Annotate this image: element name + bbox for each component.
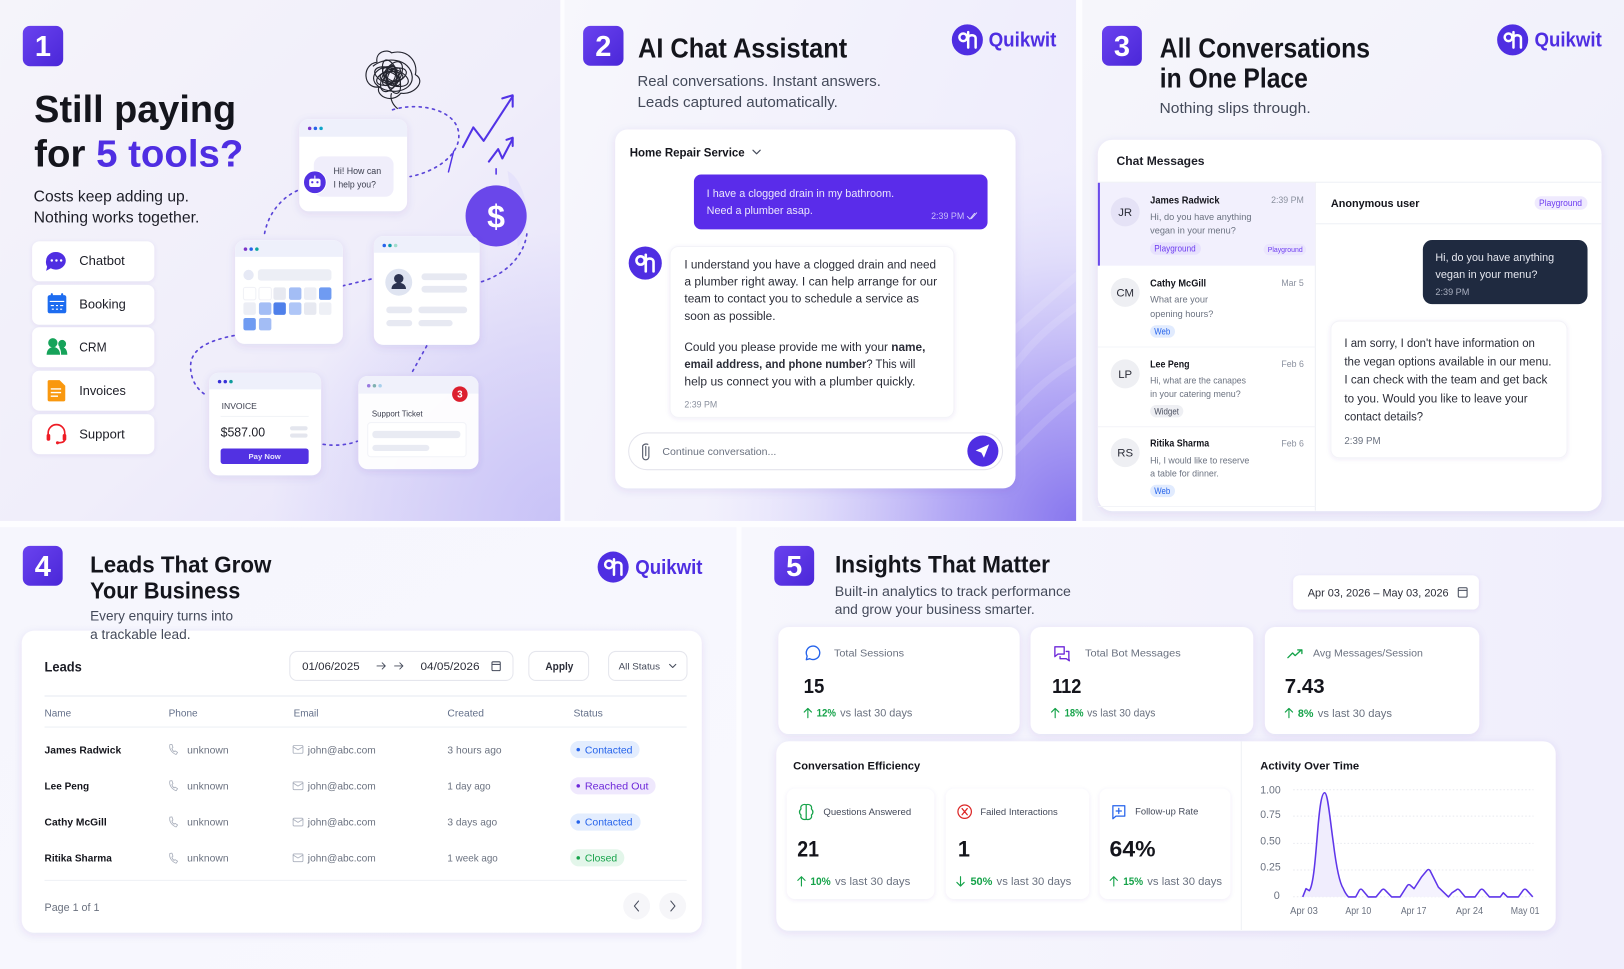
table header: Name (45, 709, 72, 720)
conversation: cathy mcgill: What are your (1150, 295, 1208, 305)
tool: invoices (32, 371, 154, 411)
button: pay now: Pay Now (248, 452, 282, 461)
message input (629, 433, 1003, 470)
conversation: cathy mcgill: Web (1154, 327, 1170, 337)
thread header: Anonymous user (1331, 198, 1420, 210)
conversation: ritika sharma: Hi, I would like to reserve (1150, 455, 1249, 465)
icon: growth arrows (448, 95, 513, 174)
tool: chatbot (32, 241, 154, 281)
tool: invoices: Invoices (79, 383, 126, 398)
row: ritika sharma: unknown (187, 854, 229, 865)
tool: chatbot: Chatbot (79, 253, 125, 268)
heading (1160, 32, 1370, 94)
conversation: cathy mcgill: CM (1116, 288, 1134, 300)
row: james radwick: James Radwick (45, 745, 121, 756)
table header: Email (294, 709, 318, 720)
stat: follow-up rate: 15% (1123, 876, 1143, 888)
row: lee peng: john@abc.com (307, 782, 376, 793)
badge 3: 3 (1114, 31, 1130, 63)
logo: quikwit (952, 24, 1057, 55)
tool: crm: CRM (79, 340, 107, 355)
stat: failed interactions: 1 (958, 837, 970, 862)
line chart: activity over time: Apr 03 (1290, 906, 1318, 917)
icon: paperclip (643, 444, 649, 460)
title: for 5 tools? (34, 134, 243, 176)
leads table card (22, 631, 702, 933)
bot reply bubble: I can check with the team and get back (1344, 373, 1547, 387)
icon: dollar coin: $ (487, 198, 505, 234)
heading: Insights That Matter (835, 552, 1050, 579)
line chart: activity over time: 1.00 (1260, 784, 1281, 796)
status filter (609, 651, 687, 680)
bot avatar (629, 246, 662, 280)
chat window card (615, 129, 1016, 488)
stat: questions answered: Questions Answered (823, 807, 911, 817)
conversation selector: Home Repair Service (630, 145, 745, 159)
user message bubble: 2:39 PM (931, 211, 964, 221)
line chart: activity over time: Apr 10 (1345, 906, 1372, 917)
analytics card (776, 741, 1556, 931)
subheading: and grow your business smarter. (835, 602, 1035, 617)
dotted connectors (191, 107, 527, 445)
badge 3 (1102, 26, 1142, 66)
subheading: Nothing slips through. (1159, 101, 1311, 117)
icon: two bubbles (1055, 647, 1069, 661)
metric: avg messages per session: 8% (1298, 708, 1314, 720)
title (34, 89, 243, 176)
stat: questions answered: 21 (797, 837, 819, 862)
row: lee peng (45, 777, 656, 794)
subtitle (34, 188, 199, 227)
subtitle: Nothing works together. (34, 210, 199, 227)
conversation: james radwick: vegan in your menu? (1150, 225, 1236, 235)
metric: total sessions: vs last 30 days (840, 708, 913, 720)
badge 2: 2 (595, 31, 611, 63)
conversation: ritika sharma: Feb 6 (1281, 438, 1304, 448)
date range filter (290, 651, 513, 680)
row: ritika sharma (45, 849, 624, 866)
badge 1: 1 (35, 31, 51, 63)
status filter: All Status (619, 662, 660, 672)
message input: Continue conversation... (662, 447, 776, 458)
bot reply bubble: I am sorry, I don't have information on (1344, 336, 1535, 350)
apply button (529, 651, 589, 680)
row: cathy mcgill (45, 814, 641, 831)
subheading: Leads captured automatically. (637, 95, 838, 111)
subheading (637, 74, 881, 111)
stat: failed interactions (946, 789, 1089, 899)
stat: follow-up rate: Follow-up Rate (1135, 807, 1198, 817)
row: lee peng: 1 day ago (447, 782, 491, 793)
metric: total sessions: 12% (817, 708, 836, 720)
subheading: a trackable lead. (90, 627, 191, 642)
line chart: activity over time (1260, 784, 1540, 917)
tool: booking (32, 285, 154, 325)
conversation: cathy mcgill: opening hours? (1150, 309, 1213, 319)
metric: total sessions (778, 627, 1020, 734)
icon: message plus (1113, 806, 1125, 819)
table header: Created (447, 709, 484, 720)
section heading: conversation efficiency: Conversation Efficiency (793, 761, 921, 773)
stat: failed interactions: 50% (970, 876, 993, 888)
line chart: activity over time: Apr 17 (1401, 906, 1426, 917)
bot message bubble: email address, and phone number? This will (684, 357, 915, 371)
heading (90, 551, 272, 604)
conversation: lee peng (1111, 359, 1304, 417)
user message bubble (694, 175, 988, 229)
conversation: ritika sharma: RS (1117, 448, 1134, 460)
chat messages card (1098, 140, 1602, 511)
stat: follow-up rate: vs last 30 days (1147, 876, 1223, 888)
conversation: ritika sharma (1111, 438, 1304, 497)
panel 4: leads (0, 527, 736, 969)
panel 1: still paying for 5 tools (0, 0, 560, 521)
heading: All Conversations (1160, 32, 1370, 63)
conversation: james radwick: 2:39 PM (1271, 195, 1304, 205)
user message bubble: Need a plumber asap. (707, 205, 813, 217)
metric: total bot messages: 18% (1065, 708, 1084, 720)
bot message bubble: team to contact you to schedule a service as (684, 292, 919, 306)
stat: questions answered: vs last 30 days (835, 876, 911, 888)
row: cathy mcgill: Cathy McGill (45, 818, 107, 829)
card: crm window (374, 236, 480, 345)
card: chatbot window: Hi! How can (334, 166, 381, 176)
date range filter: 04/05/2026 (421, 661, 480, 673)
metric: avg messages per session (1265, 627, 1479, 734)
icon: scribble (366, 51, 420, 109)
line chart: activity over time: 0.50 (1260, 835, 1281, 847)
row: james radwick: john@abc.com (307, 745, 376, 756)
tool: crm (32, 327, 154, 367)
icon: failure circle (958, 805, 971, 818)
section heading: activity over time: Activity Over Time (1260, 761, 1359, 773)
card: chatbot window (299, 119, 407, 211)
card: support ticket window: Support Ticket (372, 409, 423, 418)
metric: total bot messages (1031, 627, 1253, 734)
metric: avg messages per session: vs last 30 days (1318, 708, 1393, 720)
table header: Phone (169, 709, 198, 720)
logo: quikwit: Quikwit (1535, 29, 1602, 52)
leads table card: Leads (45, 660, 82, 675)
metric: avg messages per session: 7.43 (1285, 675, 1325, 698)
row: lee peng: Lee Peng (45, 782, 89, 793)
badge 2 (583, 26, 624, 66)
thread header: Playground (1539, 198, 1582, 208)
bot message bubble (670, 246, 954, 417)
bot message bubble: 2:39 PM (684, 399, 717, 409)
pagination: Page 1 of 1 (45, 902, 99, 914)
conversation: ritika sharma: Ritika Sharma (1150, 439, 1210, 450)
bot message bubble: soon as possible. (684, 309, 776, 323)
apply button: Apply (545, 661, 573, 673)
conversation: lee peng: in your catering menu? (1150, 389, 1241, 399)
row: lee peng: Reached Out (585, 782, 649, 793)
dark user bubble: vegan in your menu? (1435, 269, 1537, 281)
conversation: lee peng: LP (1118, 369, 1132, 381)
row: james radwick (45, 741, 640, 758)
badge 4: 4 (35, 551, 51, 583)
user message bubble: I have a clogged drain in my bathroom. (707, 188, 894, 200)
conversation: james radwick: Hi, do you have anything (1150, 212, 1251, 222)
panel 5: insights (742, 527, 1624, 969)
dark user bubble (1423, 240, 1588, 304)
row: lee peng: unknown (187, 782, 229, 793)
date range: Apr 03, 2026 – May 03, 2026 (1308, 587, 1449, 599)
conversation: james radwick (1098, 183, 1315, 266)
bot message bubble: a plumber right away. I can help arrange for our (684, 275, 937, 289)
line chart: activity over time: 0.25 (1260, 862, 1281, 874)
tool: booking: Booking (79, 297, 126, 312)
stat: failed interactions: vs last 30 days (997, 876, 1072, 888)
table header (45, 709, 603, 720)
title: Still paying (34, 89, 236, 131)
metric: total bot messages: vs last 30 days (1087, 708, 1156, 720)
conversation: cathy mcgill (1111, 278, 1304, 338)
badge 1 (23, 26, 63, 66)
logo: quikwit: Quikwit (989, 29, 1057, 52)
panel 3: all conversations (1082, 0, 1624, 521)
logo: quikwit: Quikwit (635, 556, 703, 579)
bot reply bubble: 2:39 PM (1344, 436, 1381, 447)
stat: follow-up rate (1100, 789, 1230, 899)
conversation: ritika sharma: Web (1154, 486, 1170, 496)
bot message bubble: I understand you have a clogged drain and need (684, 257, 936, 271)
bot message bubble: help us connect you with a plumber quickly. (684, 374, 915, 388)
metric: total sessions: 15 (804, 675, 824, 698)
heading: AI Chat Assistant (638, 32, 847, 63)
icon: trend (1288, 650, 1302, 658)
thread header (1331, 196, 1587, 210)
card: invoice window (209, 373, 321, 475)
row: cathy mcgill: 3 days ago (447, 818, 497, 829)
row: james radwick: unknown (187, 745, 229, 756)
conversation: james radwick: JR (1118, 207, 1132, 219)
logo: quikwit (598, 552, 703, 583)
subheading: Real conversations. Instant answers. (637, 74, 881, 90)
metric: avg messages per session: Avg Messages/Session (1313, 649, 1423, 660)
line chart: activity over time: 0 (1274, 890, 1280, 902)
line chart: activity over time: May 01 (1511, 906, 1540, 917)
card: calendar window (235, 240, 343, 344)
card: chatbot window: I help you? (334, 179, 376, 189)
subheading: Every enquiry turns into (90, 608, 233, 623)
subheading: Built-in analytics to track performance (835, 584, 1071, 599)
badge 5: 5 (786, 551, 802, 583)
bot reply bubble: contact details? (1344, 409, 1423, 423)
card: invoice window: $587.00 (221, 425, 265, 440)
icon: chat bubble (806, 646, 820, 660)
bot reply bubble (1331, 321, 1567, 458)
subheading (90, 608, 233, 642)
row: cathy mcgill: john@abc.com (307, 818, 376, 829)
subtitle: Costs keep adding up. (34, 188, 189, 205)
heading: Your Business (90, 578, 240, 604)
row: ritika sharma: john@abc.com (307, 854, 376, 865)
stat: failed interactions: Failed Interactions (980, 807, 1058, 817)
date range (1293, 575, 1479, 610)
pagination (45, 893, 686, 919)
conversation: lee peng: Widget (1154, 406, 1179, 416)
conversation: ritika sharma: a table for dinner. (1150, 469, 1219, 479)
metric: total bot messages: 112 (1052, 675, 1081, 698)
icon: robot (303, 171, 326, 194)
conversation: james radwick: James Radwick (1150, 196, 1220, 207)
badge 5 (774, 546, 814, 586)
conversation: cathy mcgill: Cathy McGill (1150, 278, 1206, 289)
stat: questions answered: 10% (810, 876, 831, 888)
conversation: james radwick: Playground (1154, 244, 1196, 254)
card: invoice window: INVOICE (222, 402, 257, 411)
row: ritika sharma: 1 week ago (447, 854, 498, 865)
panel 2: ai chat assistant (564, 0, 1082, 521)
dark user bubble: Hi, do you have anything (1435, 252, 1554, 264)
card: support ticket window (358, 376, 479, 469)
icon: dollar coin (466, 171, 527, 246)
line chart: activity over time: 0.75 (1260, 809, 1281, 821)
row: ritika sharma: Ritika Sharma (45, 854, 112, 865)
row: james radwick: 3 hours ago (447, 745, 502, 756)
tool list (32, 241, 154, 454)
logo: quikwit (1497, 24, 1602, 55)
stat: follow-up rate: 64% (1110, 837, 1156, 862)
bot message bubble: Could you please provide me with your name, (684, 340, 925, 354)
badge 4 (23, 546, 63, 586)
icon: send (967, 436, 998, 467)
conversation: lee peng: Feb 6 (1281, 359, 1304, 369)
tool: support (32, 414, 154, 454)
bot reply bubble: to you. Would you like to leave your (1344, 391, 1528, 405)
icon: brain (799, 804, 813, 820)
stat: questions answered (787, 789, 934, 899)
row: cathy mcgill: Contacted (585, 818, 633, 829)
date range filter: 01/06/2025 (302, 661, 360, 673)
conversation: lee peng: Hi, what are the canapes (1150, 376, 1246, 386)
notification badge: 3 (457, 390, 463, 401)
chat messages card: Chat Messages (1116, 154, 1205, 168)
metric: total bot messages: Total Bot Messages (1085, 649, 1181, 660)
metric: total sessions: Total Sessions (834, 649, 904, 660)
conversation: lee peng: Lee Peng (1150, 359, 1190, 370)
tool: support: Support (79, 427, 125, 442)
row: james radwick: Contacted (585, 745, 633, 756)
bot reply bubble: the vegan options available in our menu. (1344, 355, 1551, 369)
table header: Status (573, 709, 603, 720)
conversation: cathy mcgill: Mar 5 (1281, 278, 1304, 288)
subheading (835, 584, 1071, 617)
dark user bubble: 2:39 PM (1435, 287, 1469, 297)
row: ritika sharma: Closed (585, 853, 617, 864)
row: cathy mcgill: unknown (187, 818, 229, 829)
line chart: activity over time: Apr 24 (1456, 906, 1484, 917)
heading: Leads That Grow (90, 551, 272, 577)
heading: in One Place (1160, 63, 1308, 94)
conversation: james radwick: Playground (1268, 245, 1303, 254)
